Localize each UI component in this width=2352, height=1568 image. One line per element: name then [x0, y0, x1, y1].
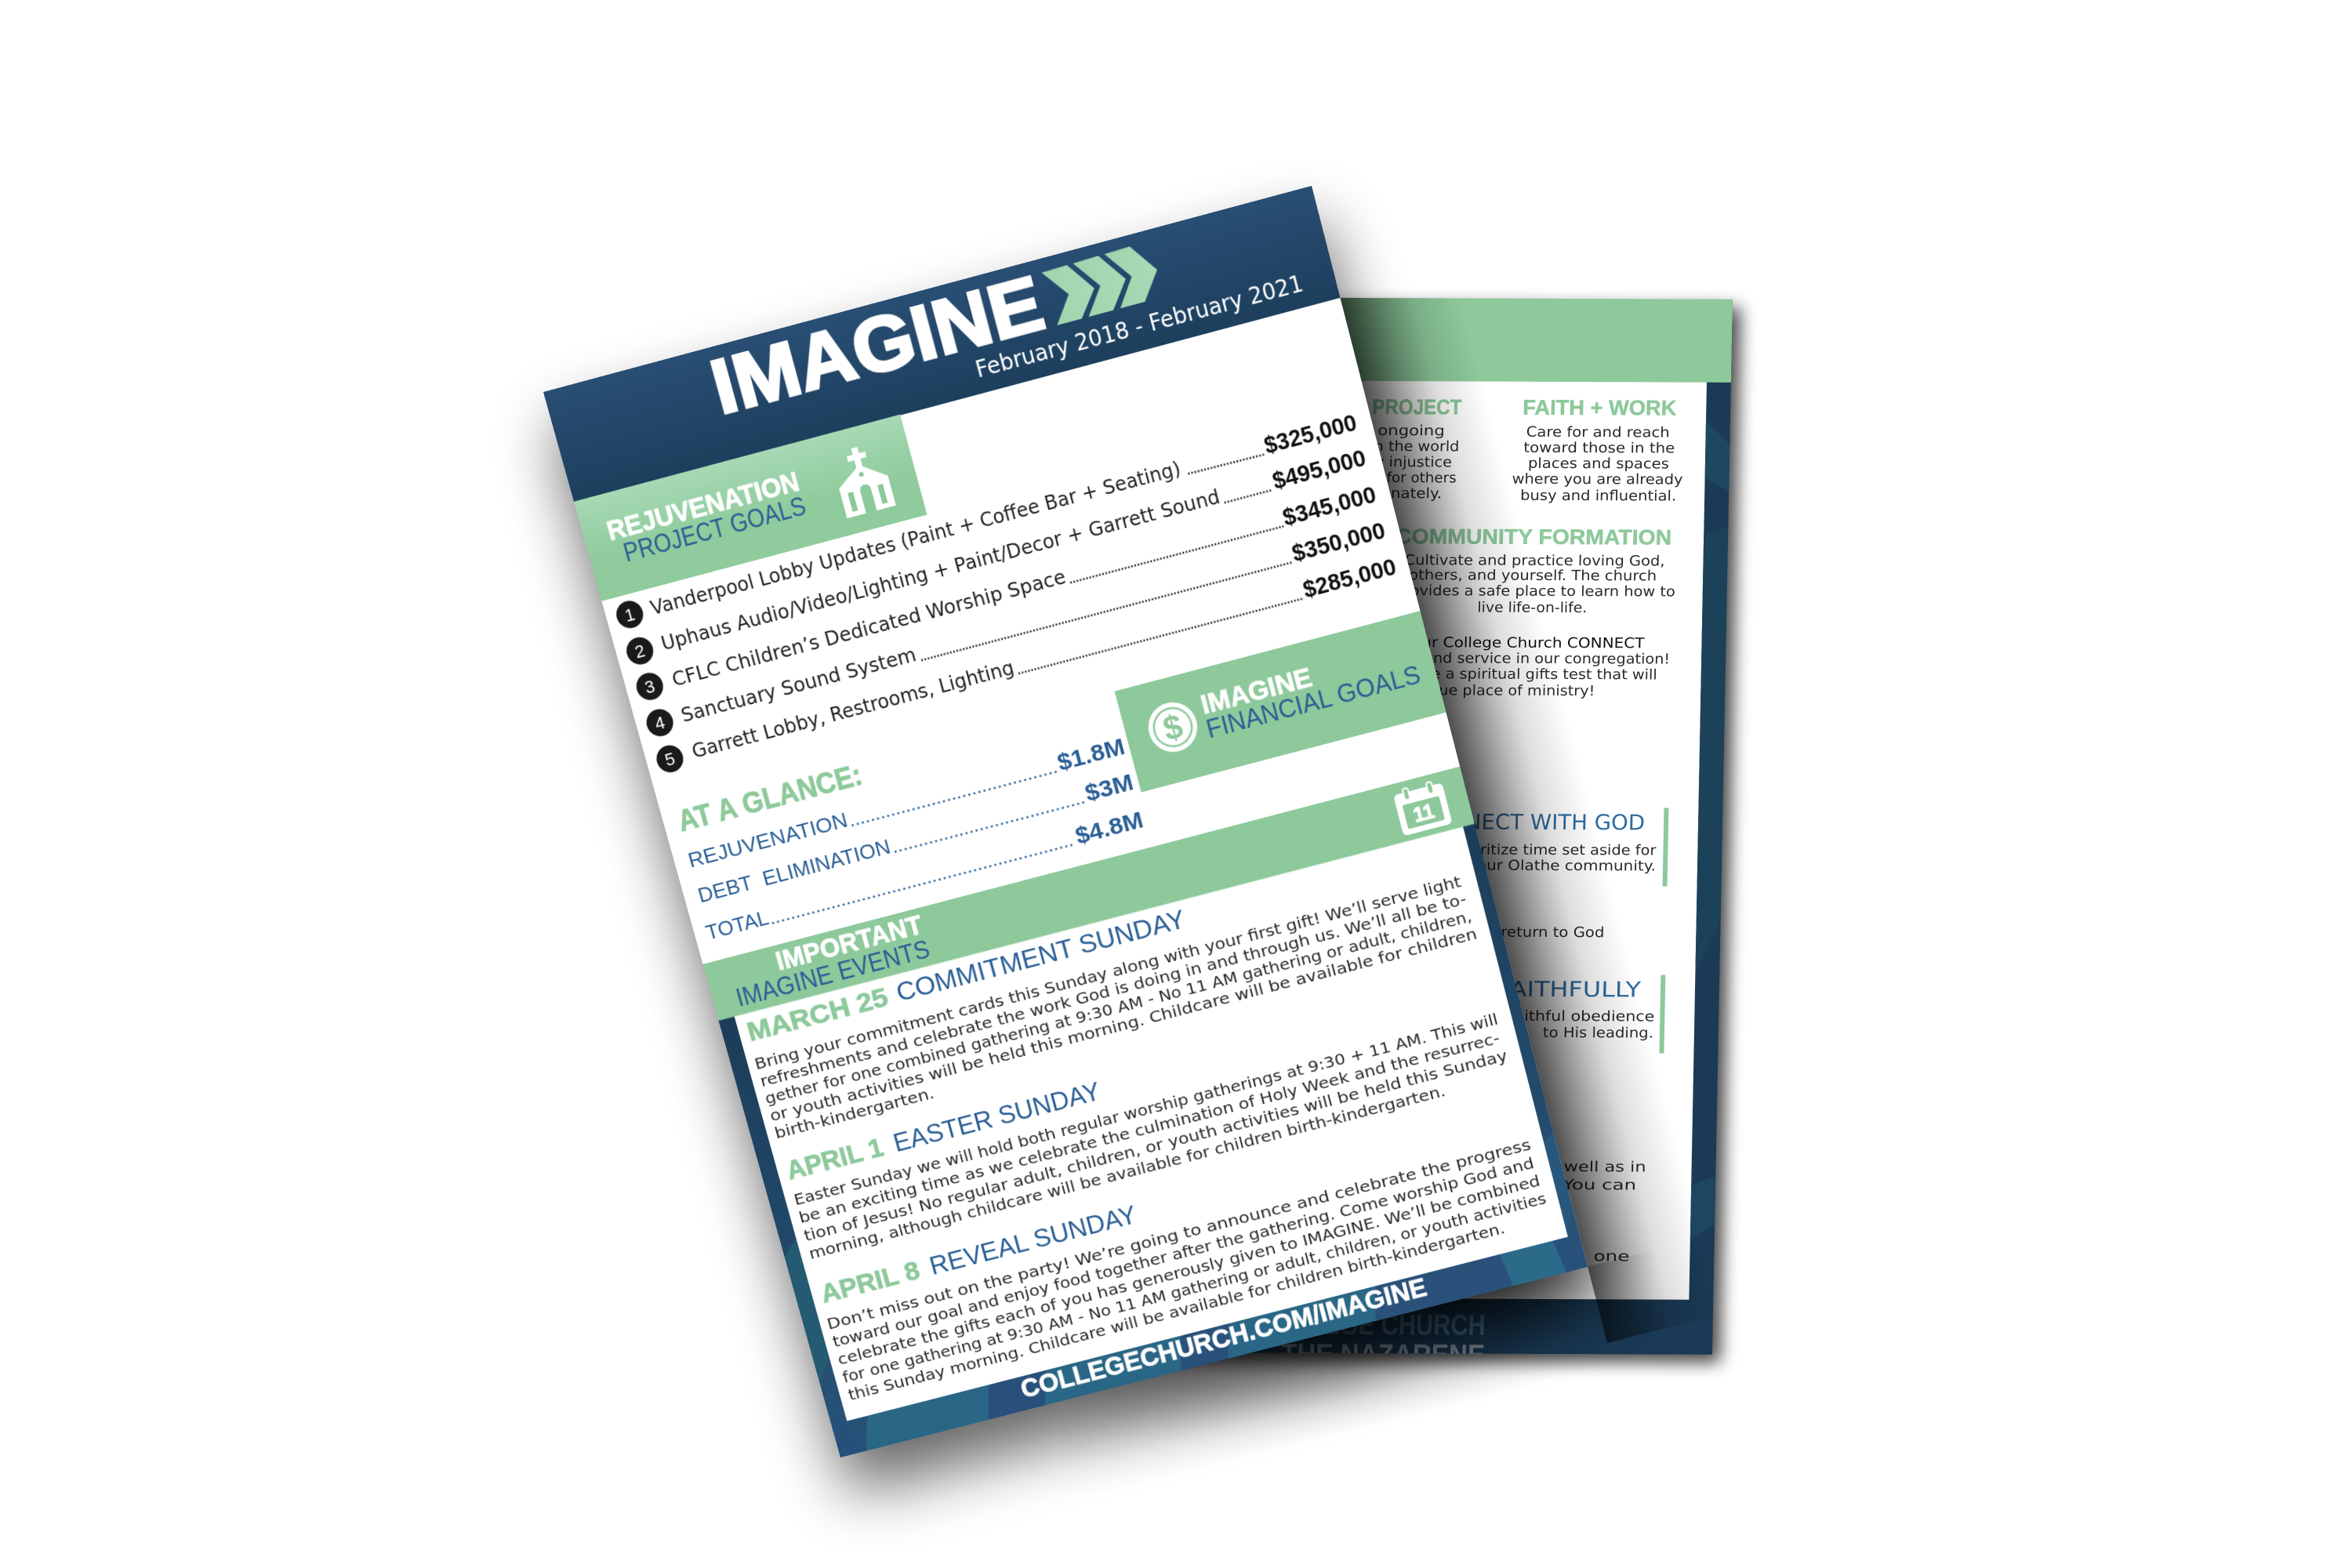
text block: partially hidden lines: well as in	[1563, 1159, 1646, 1175]
at a glance heading: AT A GLANCE:	[683, 767, 875, 849]
row: rejuvenation: REJUVENATION	[695, 818, 860, 884]
text block: faith + work: places and spaces	[1528, 456, 1669, 473]
event date: MARCH 25	[757, 999, 907, 1067]
row: rejuvenation: $1.8M	[1064, 739, 1138, 783]
number 3	[633, 670, 666, 703]
text block: partially hidden lines: You can	[1562, 1177, 1636, 1193]
footer url: COLLEGECHURCH.COM/IMAGINE	[1047, 1303, 1465, 1445]
heading: community formation: COMMUNITY FORMATION	[1396, 524, 1671, 550]
number 1	[613, 598, 646, 631]
event description: birth-kindergarten.	[789, 1105, 955, 1167]
at a glance rows	[682, 732, 1147, 946]
tag title: IMAGINE	[1206, 666, 1323, 725]
event description: Bring your commitment cards this Sunday along with your first gift! We’ll serve light	[767, 882, 1480, 1094]
icon: calendar: 11	[1425, 808, 1450, 835]
header band	[543, 186, 1340, 503]
number 3: 3	[648, 682, 662, 704]
row: debt elimination: DEBT ELIMINATION	[706, 845, 904, 921]
event description: Easter Sunday we will hold both regular worship gatherings at 9:30 + 11 AM. This will	[811, 1025, 1523, 1238]
band title: IMPORTANT	[785, 924, 940, 993]
white content panel	[735, 826, 1568, 1421]
event: april 8	[815, 1101, 1552, 1404]
text block: project: passionately.	[1341, 485, 1442, 502]
icon: dollar coin	[1143, 697, 1203, 757]
back page shadow	[967, 304, 1740, 1363]
list item 1	[648, 408, 1359, 622]
event description: be an exciting time as we celebrate the culmination of Holy Week and the resurrec-	[816, 1045, 1526, 1257]
mockup scene: back page	[1184, 292, 1753, 1376]
event title: EASTER SUNDAY	[909, 1097, 1125, 1183]
heading: connect with god: CONNECT WITH GOD	[1417, 810, 1645, 835]
band subtitle: IMAGINE EVENTS	[746, 949, 948, 1031]
list item 2: $495,000	[1269, 443, 1367, 495]
event date: APRIL 8	[839, 1287, 946, 1344]
text block: project: in the world	[1370, 438, 1460, 455]
date range: February 2018 - February 2021	[970, 268, 1298, 383]
event description: refreshments and celebrate the work God is doing in and through us. We’ll all be to-	[773, 900, 1486, 1112]
text block: live faithfully: faithful obedience	[1508, 1008, 1655, 1025]
panel: important imagine events band	[703, 767, 1475, 1021]
text block: partially hidden lines	[1560, 1159, 1646, 1265]
list item 3	[669, 480, 1379, 692]
text block: connect: Our College Church CONNECT	[1409, 634, 1646, 652]
text block: connect with god: your Olathe community.	[1468, 858, 1656, 875]
list item 4	[677, 516, 1388, 728]
panel: rejuvenation project goals tag	[574, 415, 927, 601]
back page church name: THE NAZARENE	[1281, 1338, 1485, 1371]
number 5: 5	[670, 757, 684, 779]
heading: project: PROJECT	[1372, 395, 1462, 419]
text block: connect: and service in our congregation!	[1424, 650, 1670, 668]
event description: tion of Jesus! No regular adult, children, or youth activities will be held this Sunday	[822, 1063, 1534, 1276]
event description: or youth activities will be held this morning. Childcare will be available for children	[784, 936, 1498, 1149]
back page church name	[1258, 1308, 1486, 1371]
text block: connect: your true place of ministry!	[1388, 682, 1595, 699]
row: total	[702, 806, 1146, 946]
event: april 1	[782, 976, 1514, 1263]
text block: connect: take a spiritual gifts test that will	[1408, 666, 1657, 683]
panel: front page	[543, 186, 1588, 1457]
tag subtitle: FINANCIAL GOALS	[1212, 663, 1432, 750]
number 2	[623, 634, 656, 667]
text block: project: for others	[1386, 470, 1457, 486]
text block: faith + work: Care for and reach	[1526, 424, 1670, 441]
text block: community formation: live life-on-life.	[1477, 600, 1588, 616]
text block: project: by injustice	[1366, 454, 1452, 470]
text block: connect	[1428, 637, 1668, 699]
text block: community formation: provides a safe place to learn how to	[1395, 583, 1675, 601]
event description: morning, although childcare will be available for children birth-kindergarten.	[827, 1101, 1473, 1295]
number 5	[653, 742, 686, 775]
heading: live faithfully: LIVE FAITHFULLY	[1436, 977, 1642, 1002]
list item 4: $350,000	[1291, 517, 1390, 568]
list item 2	[658, 444, 1369, 656]
list item 5	[688, 553, 1399, 764]
text block: community formation: Cultivate and practice loving God,	[1404, 552, 1665, 570]
text block: partially hidden lines: one	[1593, 1248, 1630, 1265]
side and footer band	[718, 823, 1588, 1457]
list item 1: Vanderpool Lobby Updates (Paint + Coffee Bar + Seating)	[652, 457, 1183, 623]
list item 3: CFLC Children’s Dedicated Worship Space	[675, 567, 1073, 697]
text block: live faithfully: to His leading.	[1543, 1025, 1653, 1042]
row: debt elimination: $3M	[1093, 775, 1147, 815]
icon: dollar coin: $	[1168, 713, 1196, 755]
tag subtitle: PROJECT GOALS	[622, 492, 811, 571]
row: rejuvenation	[684, 732, 1127, 873]
event description: toward our goal and enjoy food together after the gathering. Come worship God and	[854, 1176, 1566, 1389]
tag title: REJUVENATION	[606, 467, 804, 549]
event description	[792, 1010, 1514, 1263]
heading: faith + work: FAITH + WORK	[1523, 396, 1677, 420]
list item 5: $285,000	[1304, 554, 1403, 605]
text block: live faithfully	[1526, 1010, 1654, 1041]
text block: project: is ongoing	[1359, 423, 1445, 439]
event title: COMMITMENT SUNDAY	[908, 916, 1205, 1025]
shadow strip on back page	[1312, 155, 1729, 1343]
event title: REVEAL SUNDAY	[949, 1227, 1166, 1314]
list item 5: Garrett Lobby, Restrooms, Lighting	[696, 660, 1023, 771]
text block: project	[1377, 425, 1458, 501]
green side bar	[1659, 975, 1665, 1054]
text block: community formation	[1406, 554, 1675, 613]
event description: Don’t miss out on the party! We’re going to announce and celebrate the progress	[848, 1156, 1563, 1370]
green side bar	[1663, 808, 1668, 887]
text block: faith + work: toward those in the	[1523, 440, 1675, 457]
text block: faith + work	[1512, 424, 1684, 505]
row: total: TOTAL	[714, 920, 783, 960]
row: total: $4.8M	[1084, 814, 1159, 859]
text block: connect with god: Prioritize time set aside for	[1451, 841, 1657, 859]
text block: faith + work: busy and influential.	[1520, 488, 1676, 505]
shadow strip below front page	[840, 1243, 1706, 1564]
number 4: 4	[659, 719, 673, 741]
back header band	[1341, 298, 1733, 383]
list item 3: $345,000	[1280, 480, 1379, 532]
text block: connect with god	[1482, 844, 1656, 873]
panel: imagine financial goals tag	[1115, 611, 1446, 793]
event: march 25	[742, 834, 1483, 1142]
icon: chevrons	[1041, 241, 1164, 325]
event description: gether for one combined gathering at 9:30 AM - No 11 AM gathering or adult, children,	[779, 918, 1492, 1131]
number 2: 2	[637, 645, 652, 667]
row: debt elimination	[695, 768, 1136, 908]
event description	[825, 1135, 1552, 1404]
list item 2: Uphaus Audio/Video/Lighting + Paint/Decor + Garrett Sound	[663, 485, 1223, 660]
number 4	[644, 706, 677, 739]
icon: calendar	[1392, 778, 1453, 836]
text block: community formation: others, and yourself. The church	[1409, 567, 1657, 584]
text block: faith + work: where you are already	[1512, 471, 1683, 488]
event description: for one gathering at 9:30 AM - No 11 AM gathering or adult, children, or youth activities	[865, 1214, 1581, 1427]
numbered project list	[613, 408, 1399, 775]
title: IMAGINE	[701, 258, 1048, 430]
back page church name: COLLEGE CHURCH	[1258, 1308, 1486, 1341]
icon: church	[829, 441, 896, 518]
text: return to god: return to God	[1501, 924, 1605, 941]
event description: this Sunday morning. Childcare will be available for children birth-kindergarten.	[871, 1245, 1540, 1446]
number 1: 1	[626, 608, 641, 630]
panel: back page	[1251, 298, 1733, 1355]
list item 1: $325,000	[1259, 407, 1357, 459]
event date: APRIL 1	[800, 1157, 906, 1213]
event description: celebrate the gifts each of you has generously given to IMAGINE. We’ll be combined	[859, 1195, 1573, 1408]
event description	[753, 872, 1483, 1142]
list item 4: Sanctuary Sound System	[684, 647, 925, 734]
